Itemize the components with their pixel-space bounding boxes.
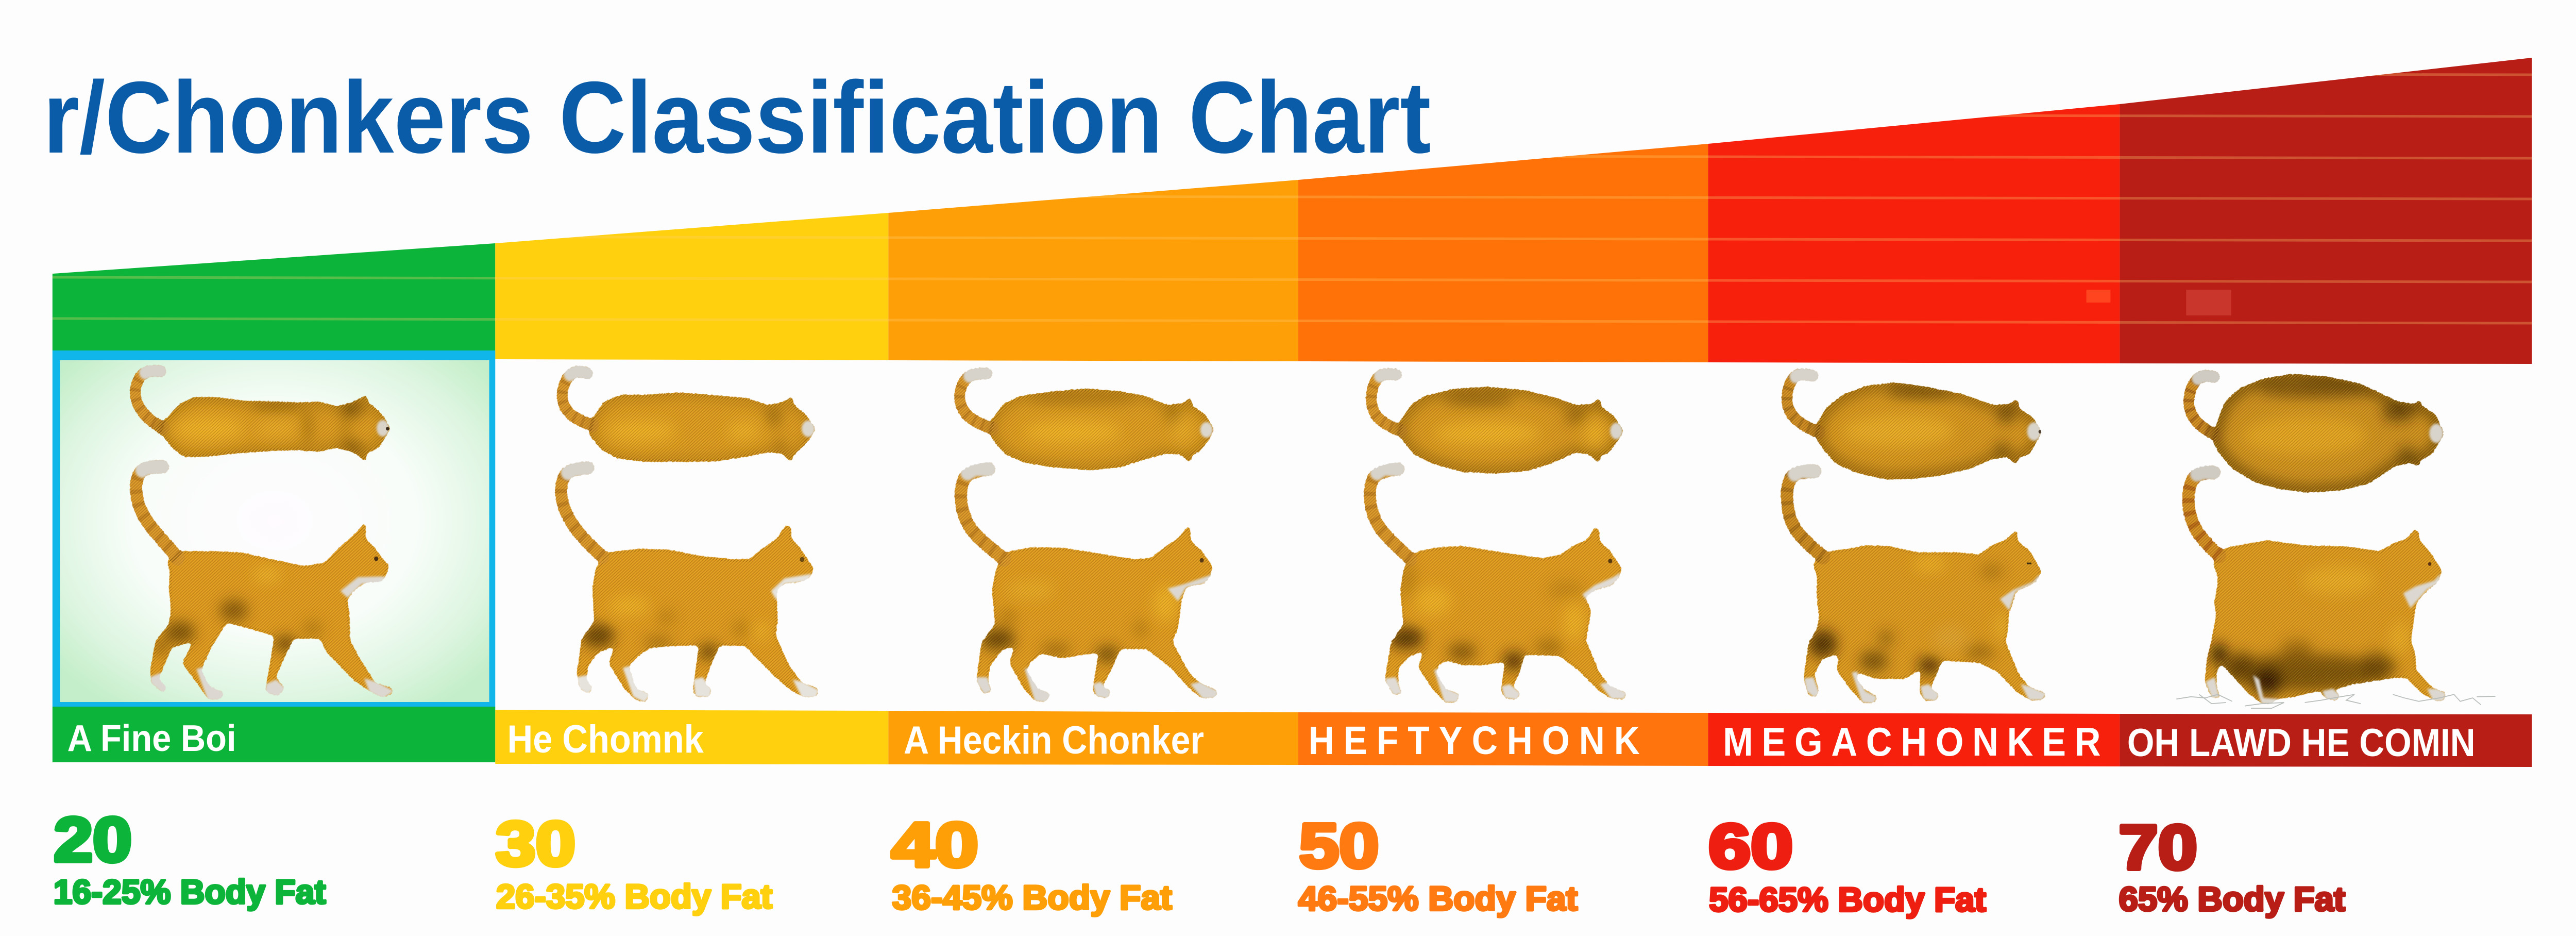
ground cracks under the cat xyxy=(2176,694,2496,708)
wedge segment: red xyxy=(1708,104,2120,363)
stat: 70, 65% body fat: 70 xyxy=(2119,812,2197,882)
label bar: A Fine Boi: A Fine Boi xyxy=(67,717,236,759)
stat: 30, 26-35% body fat xyxy=(496,809,772,916)
title: r/Chonkers Classification Chart xyxy=(43,60,1431,174)
label bar: A Heckin Chonker xyxy=(888,711,1298,765)
icon: side-view cat 2 xyxy=(561,468,819,703)
stat: 70, 65% body fat xyxy=(2119,812,2345,918)
panel: highlighted frame around A Fine Boi xyxy=(53,350,495,707)
stat: 30, 26-35% body fat: 26-35% Body Fat xyxy=(496,878,772,916)
label bar: He Chomnk: He Chomnk xyxy=(507,718,704,761)
stat: 40, 36-45% body fat: 40 xyxy=(892,810,978,880)
label bar: A Heckin Chonker: A Heckin Chonker xyxy=(904,719,1204,762)
cats: A Heckin Chonker xyxy=(959,374,1218,703)
stat: 20, 16-25% body fat: 16-25% Body Fat xyxy=(54,873,326,911)
wedge segment: green xyxy=(53,243,495,350)
icon: side-view cat 6 xyxy=(2189,471,2447,705)
icon: side-view cat 3 xyxy=(961,468,1218,703)
stat: 60, 56-65% body fat: 60 xyxy=(1708,811,1793,881)
label bar: He Chomnk xyxy=(495,710,888,764)
stat: 60, 56-65% body fat xyxy=(1708,811,1986,919)
label bar: Oh Lawd He Comin xyxy=(2120,714,2532,767)
label bar: Heftychonk xyxy=(1298,712,1708,766)
label bar: Heftychonk: HEFTYCHONK xyxy=(1309,718,1640,763)
icon: side-view cat 4 xyxy=(1370,468,1628,703)
stat: 20, 16-25% body fat xyxy=(54,805,326,911)
stat: 30, 26-35% body fat: 30 xyxy=(496,809,575,879)
label bar: Oh Lawd He Comin: OH LAWD HE COMIN xyxy=(2127,722,2476,765)
stat: 50, 46-55% body fat: 50 xyxy=(1299,811,1379,881)
icon: overhead cat 1 xyxy=(135,371,390,461)
cats: He Chomnk xyxy=(561,371,819,703)
stat: 70, 65% body fat: 65% Body Fat xyxy=(2119,880,2345,918)
wedge segment: orange xyxy=(888,180,1298,361)
stat: 50, 46-55% body fat xyxy=(1298,811,1578,918)
wedge segment: dark orange xyxy=(1298,144,1708,362)
icon: overhead cat 5 xyxy=(1787,374,2042,479)
cats: Heftychonk xyxy=(1370,374,1628,703)
wedge segment: dark red xyxy=(2120,58,2532,364)
label bar: Megachonker: MEGACHONKER xyxy=(1723,720,2100,764)
stat: 40, 36-45% body fat: 36-45% Body Fat xyxy=(892,879,1172,917)
cats: Oh Lawd He Comin xyxy=(2176,375,2496,708)
icon: overhead cat 2 xyxy=(562,371,815,462)
wedge segment: yellow xyxy=(495,213,888,360)
icon: overhead cat 4 xyxy=(1371,374,1623,473)
stat: 60, 56-65% body fat: 56-65% Body Fat xyxy=(1709,881,1986,919)
icon: side-view cat 1 xyxy=(136,466,394,701)
stat: 20, 16-25% body fat: 20 xyxy=(54,805,132,875)
icon: side-view cat 5 xyxy=(1787,470,2046,704)
cats: Megachonker xyxy=(1787,374,2046,704)
label bar: A Fine Boi xyxy=(53,707,495,762)
stat: 40, 36-45% body fat xyxy=(892,810,1172,917)
wedge chart: rising coloured band xyxy=(53,58,2532,364)
icon: overhead cat 3 xyxy=(959,374,1213,470)
cats: A Fine Boi xyxy=(135,371,394,701)
icon: overhead cat 6 xyxy=(2189,375,2444,492)
stat: 50, 46-55% body fat: 46-55% Body Fat xyxy=(1298,880,1578,918)
